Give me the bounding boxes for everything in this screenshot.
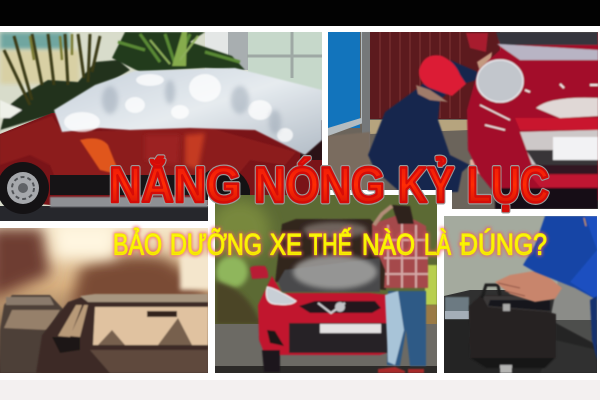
panel: car battery [444,216,598,373]
battery [469,285,556,373]
title: NẮNG NÓNG KỶ LỤC: LỤC [467,157,549,213]
subtitle: BẢO DƯỠNG XE THẾ NÀO LÀ ĐÚNG?: ĐÚNG? [460,228,547,262]
subtitle: BẢO DƯỠNG XE THẾ NÀO LÀ ĐÚNG?: ĐÚNG? [460,228,547,262]
subtitle: BẢO DƯỠNG XE THẾ NÀO LÀ ĐÚNG?: THẾ [309,228,352,262]
subtitle: BẢO DƯỠNG XE THẾ NÀO LÀ ĐÚNG?: NÀO [362,228,415,262]
title: NẮNG NÓNG KỶ LỤC: NẮNG [109,157,241,213]
panel: car under silver cover [0,32,322,221]
subtitle: BẢO DƯỠNG XE THẾ NÀO LÀ ĐÚNG? [113,228,547,262]
wheel [0,162,49,214]
road [0,206,208,221]
silver cover [54,68,322,155]
palm foliage [0,32,245,132]
title: NẮNG NÓNG KỶ LỤC: NẮNG [109,157,241,213]
title: NẮNG NÓNG KỶ LỤC: KỶ [398,157,454,213]
subtitle: BẢO DƯỠNG XE THẾ NÀO LÀ ĐÚNG?: NÀO [362,228,415,262]
bottom pale band [0,380,600,400]
subtitle: BẢO DƯỠNG XE THẾ NÀO LÀ ĐÚNG?: LÀ [424,228,451,262]
rear car [0,295,64,373]
title: NẮNG NÓNG KỶ LỤC: NÓNG [254,157,385,213]
hand [495,270,562,302]
hood and steam [250,219,386,292]
red car body [0,113,322,205]
top black bar [0,0,600,26]
subtitle: BẢO DƯỠNG XE THẾ NÀO LÀ ĐÚNG?: LÀ [424,228,451,262]
panel: overheating Nissan [210,195,437,373]
front car [36,294,208,373]
mechanic [368,52,498,192]
panel: man washing red car [328,32,600,209]
title: NẮNG NÓNG KỶ LỤC [109,157,549,213]
subtitle: BẢO DƯỠNG XE THẾ NÀO LÀ ĐÚNG?: XE [270,228,302,262]
title: NẮNG NÓNG KỶ LỤC: KỶ [398,157,454,213]
title: NẮNG NÓNG KỶ LỤC: LỤC [467,157,549,213]
subtitle: BẢO DƯỠNG XE THẾ NÀO LÀ ĐÚNG?: XE [270,228,302,262]
subtitle: BẢO DƯỠNG XE THẾ NÀO LÀ ĐÚNG?: BẢO [113,228,162,262]
subtitle: BẢO DƯỠNG XE THẾ NÀO LÀ ĐÚNG?: THẾ [309,228,352,262]
man in plaid [372,205,428,373]
blue sleeve [523,216,598,360]
red car [258,276,390,372]
subtitle: BẢO DƯỠNG XE THẾ NÀO LÀ ĐÚNG?: BẢO [113,228,162,262]
red car front [466,32,600,209]
panel: sunset traffic [0,224,212,373]
subtitle: BẢO DƯỠNG XE THẾ NÀO LÀ ĐÚNG?: DƯỠNG [170,228,262,262]
subtitle: BẢO DƯỠNG XE THẾ NÀO LÀ ĐÚNG?: DƯỠNG [170,228,262,262]
title: NẮNG NÓNG KỶ LỤC: NÓNG [254,157,385,213]
